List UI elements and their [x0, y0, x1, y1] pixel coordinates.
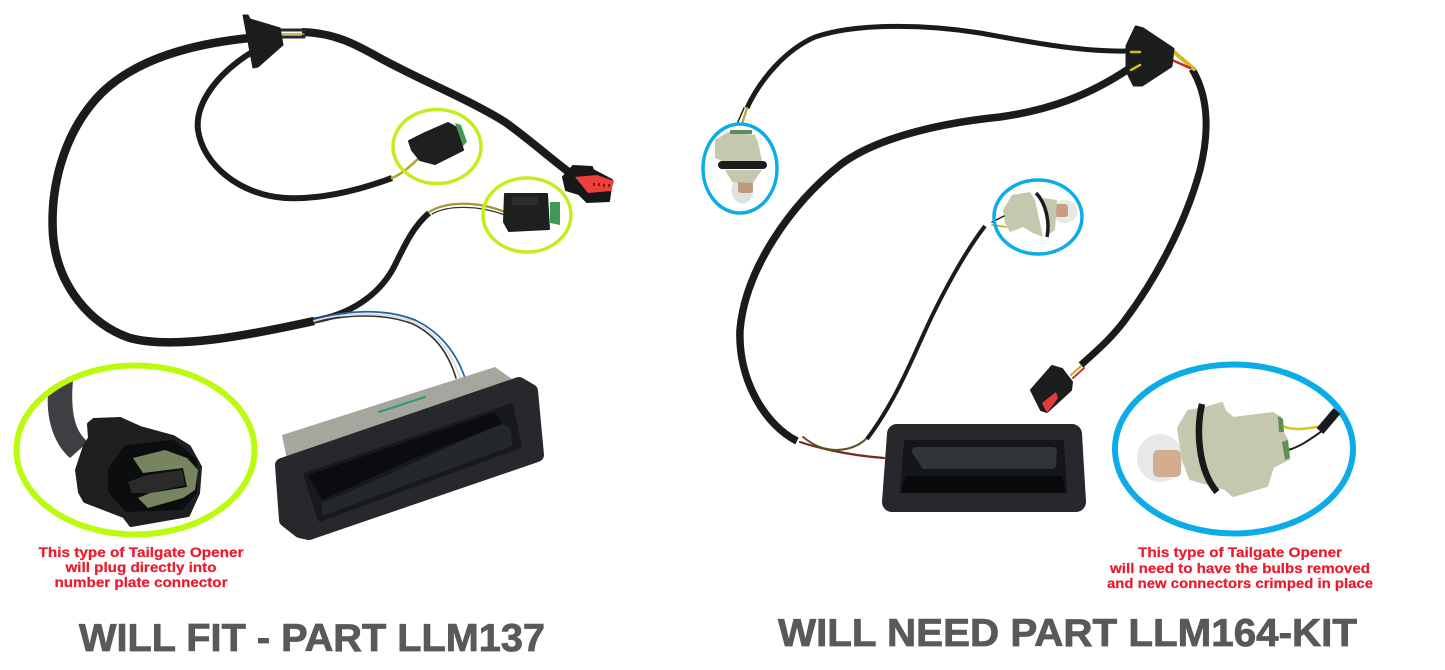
connector: lower green-tipped plug — [504, 194, 560, 231]
callout ring: upper connector — [393, 110, 481, 184]
callout ring: large lime — [16, 366, 254, 534]
callout ring: large blue — [1115, 364, 1353, 534]
caption: right: This type of Tailgate Opener — [1138, 544, 1343, 560]
panel: will fit part LLM137 — [16, 15, 614, 660]
callout ring: right bulb — [994, 180, 1082, 254]
caption: left: This type of Tailgate Opener — [38, 544, 244, 560]
connector: upper green-tipped plug — [409, 123, 467, 164]
panel: will need part LLM164-KIT — [703, 26, 1373, 655]
caption: right: will need to have the bulbs removed — [1109, 560, 1370, 576]
bulb close-up — [1137, 403, 1337, 496]
tailgate handle: left — [282, 367, 537, 533]
bulb: upper left — [715, 130, 767, 204]
caption: right: and new connectors crimped in place — [1107, 575, 1373, 591]
wiring harness: left — [53, 30, 570, 378]
heading: will need: WILL NEED PART LLM164-KIT — [778, 612, 1357, 655]
heading: will fit: WILL FIT - PART LLM137 — [79, 617, 545, 660]
caption: right — [1107, 544, 1373, 591]
callout ring: upper left bulb — [703, 124, 777, 213]
bulb: right — [992, 192, 1078, 237]
tailgate handle: right — [892, 434, 1076, 502]
connector: bottom plug — [1031, 366, 1072, 413]
connector close-up: left — [48, 380, 200, 525]
grommet: right — [1127, 27, 1173, 85]
caption: left: number plate connector — [54, 574, 228, 590]
caption: left — [38, 544, 244, 590]
caption: left: will plug directly into — [64, 559, 216, 575]
callout ring: lower connector — [483, 178, 571, 252]
grommet: left — [243, 15, 283, 68]
wiring harness: right — [737, 26, 1206, 458]
connector: red plug — [563, 166, 614, 202]
